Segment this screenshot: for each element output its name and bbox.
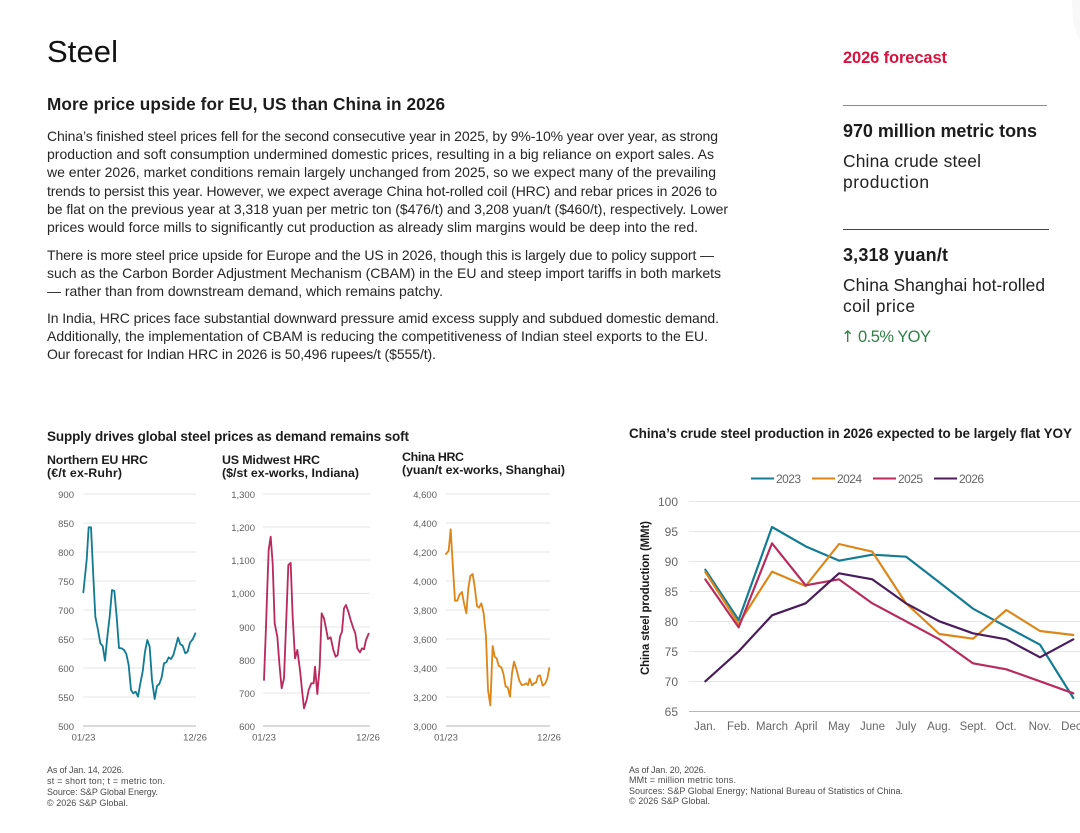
- chart: US Midwest HRC: 01/23: [252, 732, 276, 744]
- chart: US Midwest HRC: [222, 453, 380, 744]
- chart: China HRC: 3,200: [413, 693, 437, 704]
- chart: Northern EU HRC: 750: [58, 577, 74, 588]
- y-axis labels: 90: [665, 555, 678, 569]
- stat: hot-rolled coil price: ↑: [841, 327, 854, 346]
- chart: Northern EU HRC: 900: [58, 490, 74, 501]
- legend: 2023: [776, 472, 801, 486]
- chart: Northern EU HRC: 550: [58, 693, 74, 704]
- chart: US Midwest HRC: 1,100: [231, 556, 255, 567]
- paragraph: Europe and US: — rather than from downstream demand, which remains patchy.: [47, 283, 443, 299]
- chart heading: China’s crude steel production in 2026 expected to be largely flat YOY: [629, 426, 1072, 441]
- forecast label: 2026 forecast: [843, 49, 948, 67]
- paragraph: China: trends to persist this year. However, we expect average China hot-rolled coil (HRC) and rebar prices in 2026 to: [47, 183, 717, 199]
- footnote: price charts: st = short ton; t = metric ton.: [47, 776, 165, 786]
- chart: US Midwest HRC: 800: [239, 656, 255, 667]
- chart: Northern EU HRC: 800: [58, 548, 74, 559]
- stat: hot-rolled coil price: [841, 245, 1045, 346]
- chart: China HRC: 3,400: [413, 664, 437, 675]
- y-axis labels: 75: [665, 645, 678, 659]
- paragraph: China: be flat on the previous year at 3,318 yuan per metric ton ($476/t) and 3,208 yuan/t ($460/t), respectively. Lower: [47, 201, 728, 217]
- paragraph: India: In India, HRC prices face substantial downward pressure amid excess supply and subdued domestic demand.: [47, 310, 719, 326]
- chart: US Midwest HRC: 1,000: [231, 589, 255, 600]
- chart: China HRC: 4,200: [413, 548, 437, 559]
- series: 2024: [705, 544, 1073, 639]
- chart: Northern EU HRC: 600: [58, 664, 74, 675]
- footnote: price charts: © 2026 S&P Global.: [47, 798, 128, 808]
- x-axis labels: [694, 721, 1080, 733]
- chart: US Midwest HRC: 12/26: [356, 732, 380, 744]
- paragraph: India: Our forecast for Indian HRC in 2026 is 50,496 rupees/t ($555/t).: [47, 346, 436, 362]
- y-axis labels: 85: [665, 585, 678, 599]
- series: 2026: [705, 573, 1073, 681]
- footnote: production chart: As of Jan. 20, 2026.: [629, 765, 706, 775]
- footnote: production chart: [629, 765, 903, 806]
- footnote: production chart: MMt = million metric tons.: [629, 775, 736, 785]
- paragraph: China: production and soft consumption undermined domestic prices, resulting in a big reliance on export sales. As: [47, 146, 714, 162]
- x-axis labels: Sept.: [960, 721, 986, 733]
- stat: crude steel production: China crude steel: [843, 151, 981, 171]
- chart: US Midwest HRC: 900: [239, 623, 255, 634]
- chart: US Midwest HRC: US Midwest HRC: [222, 453, 320, 467]
- chart: Northern EU HRC: 650: [58, 635, 74, 646]
- footnote: price charts: Source: S&P Global Energy.: [47, 787, 158, 797]
- stat: crude steel production: production: [843, 172, 929, 192]
- chart: US Midwest HRC: 700: [239, 689, 255, 700]
- x-axis labels: May: [828, 721, 850, 733]
- chart: China HRC: 4,000: [413, 577, 437, 588]
- stat: hot-rolled coil price: 3,318 yuan/t: [843, 245, 948, 265]
- chart: US Midwest HRC: 1,200: [231, 523, 255, 534]
- stat: crude steel production: [843, 121, 1037, 192]
- panel: 2026 forecast: [841, 49, 1049, 346]
- chart: Northern EU HRC: 850: [58, 519, 74, 530]
- y-axis labels: [658, 495, 678, 719]
- x-axis labels: Feb.: [727, 721, 750, 733]
- paragraph: China: we enter 2026, market conditions remain largely unchanged from 2025, so we expect many of the prevailing: [46, 164, 716, 180]
- stat: hot-rolled coil price: China Shanghai hot-rolled: [843, 275, 1045, 295]
- chart: Northern EU HRC: (€/t ex-Ruhr): [47, 466, 122, 480]
- y-axis labels: 70: [665, 675, 678, 689]
- chart: Northern EU HRC: 700: [58, 606, 74, 617]
- legend: [751, 472, 984, 486]
- paragraph: India: [47, 310, 719, 362]
- chart: China HRC: 12/26: [537, 732, 561, 744]
- chart: China HRC: 4,600: [413, 490, 437, 501]
- footnote: production chart: © 2026 S&P Global.: [629, 796, 710, 806]
- paragraph: China: [46, 128, 728, 235]
- chart: US Midwest HRC: ($/st ex-works, Indiana): [222, 466, 359, 480]
- paragraph: Europe and US: [47, 247, 721, 299]
- title: Steel: [47, 34, 118, 69]
- x-axis labels: July: [896, 721, 916, 733]
- x-axis labels: June: [860, 721, 885, 733]
- paragraph: China: China’s finished steel prices fell for the second consecutive year in 2025, by 9%-10% year over year, as strong: [47, 128, 718, 144]
- stat: hot-rolled coil price: 0.5% YOY: [858, 328, 931, 346]
- heading: More price upside for EU, US than China in 2026: [47, 94, 445, 114]
- footnote: production chart: Sources: S&P Global Energy; National Bureau of Statistics of China.: [629, 786, 903, 796]
- chart: China HRC: 3,600: [413, 635, 437, 646]
- footnote: price charts: As of Jan. 14, 2026.: [47, 765, 124, 775]
- chart: China HRC: 4,400: [413, 519, 437, 530]
- chart: Northern EU HRC: [47, 453, 207, 744]
- article text: [46, 94, 728, 362]
- stat: hot-rolled coil price: coil price: [843, 296, 915, 316]
- panel: China crude steel production chart: [629, 426, 1080, 806]
- y-axis title: China steel production (MMt): [640, 521, 652, 675]
- paragraph: India: Additionally, the implementation of CBAM is reducing the competitiveness of Indian steel exports to the EU.: [47, 328, 708, 344]
- x-axis labels: Nov.: [1029, 721, 1051, 733]
- chart: China HRC: 01/23: [434, 732, 458, 744]
- y-axis labels: 100: [658, 495, 678, 509]
- chart: Northern EU HRC: 12/26: [183, 732, 207, 744]
- x-axis labels: Oct.: [995, 721, 1017, 733]
- legend: 2026: [959, 472, 984, 486]
- x-axis labels: Jan.: [694, 721, 716, 733]
- chart group heading: Supply drives global steel prices as demand remains soft: [47, 429, 410, 444]
- paragraph: Europe and US: There is more steel price upside for Europe and the US in 2026, though this is largely due to policy support —: [47, 247, 714, 263]
- series: 2023: [705, 527, 1073, 698]
- series: 2025: [705, 543, 1073, 693]
- chart: China HRC: 3,800: [413, 606, 437, 617]
- chart: China HRC: 3,000: [413, 722, 437, 733]
- x-axis labels: Aug.: [927, 721, 951, 733]
- legend: 2025: [898, 472, 923, 486]
- x-axis labels: March: [756, 721, 788, 733]
- y-axis labels: 95: [665, 525, 678, 539]
- y-axis labels: 80: [665, 615, 678, 629]
- panel: global steel prices: [47, 429, 565, 808]
- chart: China HRC: [402, 450, 565, 744]
- stat: crude steel production: 970 million metric tons: [843, 121, 1037, 141]
- chart: US Midwest HRC: 600: [239, 722, 255, 733]
- chart: Northern EU HRC: Northern EU HRC: [47, 453, 148, 467]
- chart: China HRC: China HRC: [402, 450, 464, 464]
- x-axis labels: April: [794, 721, 818, 733]
- chart: Northern EU HRC: 01/23: [72, 732, 95, 744]
- legend: 2024: [837, 472, 862, 486]
- line series: [705, 527, 1073, 698]
- chart: US Midwest HRC: 1,300: [231, 490, 255, 501]
- footnote: price charts: [47, 765, 165, 808]
- paragraph: China: prices would force mills to significantly cut production as already slim margins would be deep into the red.: [47, 219, 698, 235]
- paragraph: Europe and US: such as the Carbon Border Adjustment Mechanism (CBAM) in the EU and steep import tariffs in both markets: [47, 265, 721, 281]
- y-axis labels: 65: [665, 705, 678, 719]
- chart: Northern EU HRC: 500: [58, 722, 74, 733]
- chart: China HRC: (yuan/t ex-works, Shanghai): [402, 463, 565, 477]
